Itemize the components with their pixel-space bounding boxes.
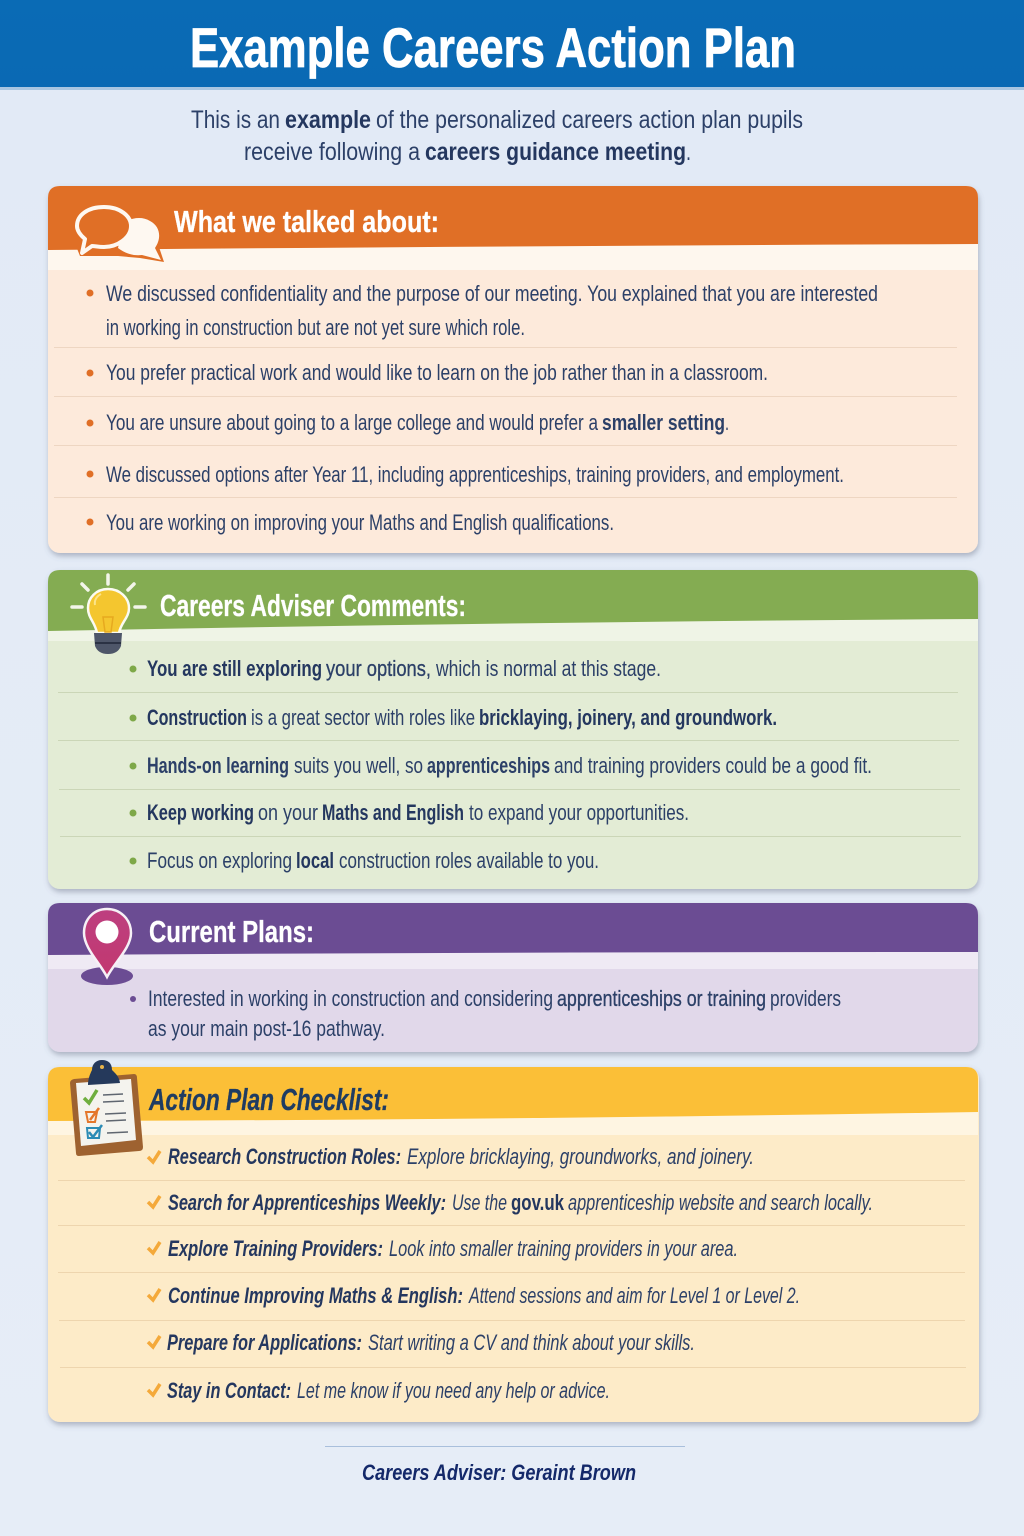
list item 2 — [130, 705, 777, 730]
list item 2: Construction — [147, 705, 247, 730]
list item 2: is a great sector with roles like — [251, 705, 475, 730]
list item 5: Focus on exploring — [147, 848, 292, 873]
title: Example Careers Action Plan — [190, 16, 796, 79]
checklist item 6: Stay in Contact: — [167, 1378, 291, 1403]
list item 5 — [130, 848, 599, 873]
list item 2: bricklaying, joinery, and groundwork. — [479, 705, 777, 730]
checklist item 2: Use the — [452, 1190, 507, 1215]
checklist item 3 — [148, 1236, 738, 1261]
list item 1: which is normal at this stage. — [435, 656, 661, 681]
plan text: providers — [770, 986, 841, 1011]
list item 5: local — [296, 848, 334, 873]
list item 3: and training providers could be a good fit. — [554, 753, 872, 778]
list item 1: You are still exploring — [147, 656, 322, 681]
panel: action plan checklist — [48, 1060, 979, 1422]
list item 3 — [130, 753, 872, 778]
heading: Current Plans: — [149, 914, 314, 949]
list item 1 — [86, 281, 878, 340]
checklist item 5: Prepare for Applications: — [167, 1330, 362, 1355]
panel: current plans — [48, 903, 978, 1052]
icon: clipboard — [70, 1060, 143, 1156]
list item 4: Maths and English — [322, 800, 464, 825]
list item 3: Hands-on learning — [147, 753, 289, 778]
intro text — [191, 106, 803, 166]
list item 3: smaller setting — [602, 410, 725, 435]
heading: Careers Adviser Comments: — [160, 588, 466, 623]
list item 5: You are working on improving your Maths and English qualifications. — [106, 510, 614, 535]
header banner — [0, 0, 1024, 90]
heading: Action Plan Checklist: — [148, 1082, 389, 1117]
list item 4: to expand your opportunities. — [469, 800, 689, 825]
icon: light bulb — [72, 575, 145, 654]
list item 1 — [130, 656, 661, 681]
checklist item 4: Attend sessions and aim for Level 1 or Level 2. — [468, 1283, 800, 1308]
checklist item 1: Explore bricklaying, groundworks, and joinery. — [407, 1144, 754, 1169]
intro text: example — [285, 106, 371, 134]
heading: What we talked about: — [174, 204, 439, 239]
checklist item 1: Research Construction Roles: — [168, 1144, 401, 1169]
checklist item 3: Explore Training Providers: — [168, 1236, 383, 1261]
icon: speech bubbles — [76, 207, 164, 262]
checklist item 6: Let me know if you need any help or advice. — [297, 1378, 610, 1403]
checklist item 2 — [148, 1190, 873, 1215]
icon: map pin — [81, 909, 133, 985]
panel: careers adviser comments — [48, 570, 978, 889]
list item 3: . — [725, 410, 729, 435]
checklist item 4 — [148, 1283, 800, 1308]
checklist item 2: gov.uk — [511, 1190, 565, 1215]
checklist item 5: Start writing a CV and think about your skills. — [368, 1330, 695, 1355]
checklist item 2: Search for Apprenticeships Weekly: — [168, 1190, 446, 1215]
checklist item 6 — [148, 1378, 610, 1403]
list item 2: You prefer practical work and would like to learn on the job rather than in a classroom. — [106, 360, 768, 385]
list item 3: suits you well, so — [294, 753, 423, 778]
intro text: of the personalized careers action plan pupils — [376, 106, 803, 134]
checklist item 2: apprenticeship website and search locally. — [568, 1190, 873, 1215]
list item 4: Keep working — [147, 800, 254, 825]
list item 3: You are unsure about going to a large college and would prefer a — [106, 410, 599, 435]
checklist item 1 — [148, 1144, 754, 1169]
intro text: receive following a — [244, 138, 420, 166]
intro text: careers guidance meeting — [425, 138, 686, 166]
intro text: This is an — [191, 106, 280, 134]
list item 1: your options, — [326, 656, 431, 681]
checklist item 4: Continue Improving Maths & English: — [168, 1283, 463, 1308]
list item 4: on your — [258, 800, 318, 825]
adviser name: Careers Adviser: Geraint Brown — [362, 1460, 636, 1485]
plan text: as your main post-16 pathway. — [148, 1016, 385, 1041]
list item 5: construction roles available to you. — [339, 848, 599, 873]
list item 4 — [130, 800, 689, 825]
intro text: . — [686, 138, 691, 166]
plan text: apprenticeships or training — [557, 986, 766, 1011]
list item 1: in working in construction but are not yet sure which role. — [106, 315, 525, 340]
panel: what we talked about — [48, 186, 978, 553]
plan text — [130, 986, 841, 1041]
plan text: Interested in working in construction and considering — [148, 986, 553, 1011]
checklist item 5 — [148, 1330, 695, 1355]
checklist item 3: Look into smaller training providers in your area. — [389, 1236, 738, 1261]
list item 3: apprenticeships — [427, 753, 550, 778]
